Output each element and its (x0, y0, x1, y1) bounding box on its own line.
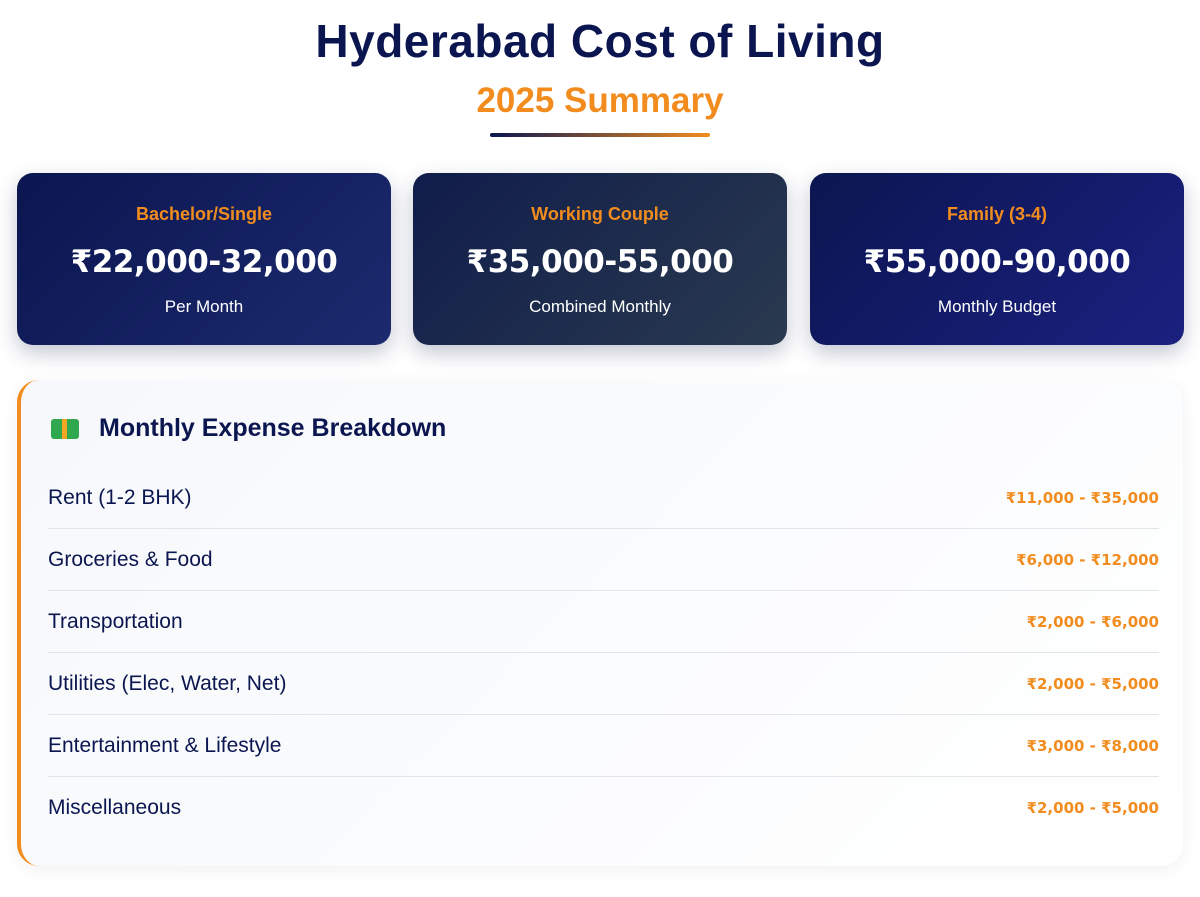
row: rent: ₹11,000 - ₹35,000 (1006, 488, 1159, 506)
row: groceries (48, 529, 1159, 591)
card: family (810, 173, 1184, 345)
card: bachelor: Per Month (165, 297, 243, 316)
row: entertainment: Entertainment & Lifestyle (48, 734, 281, 756)
row: entertainment (48, 715, 1159, 777)
subtitle: 2025 Summary (476, 81, 724, 120)
title: Hyderabad Cost of Living (315, 15, 885, 67)
card: family: Monthly Budget (938, 297, 1056, 316)
card: couple (413, 173, 787, 345)
panel: expense breakdown (17, 380, 1183, 866)
row: transport: Transportation (48, 610, 183, 632)
row: groceries: ₹6,000 - ₹12,000 (1016, 550, 1159, 568)
row: groceries: Groceries & Food (48, 548, 213, 570)
card: bachelor: Bachelor/Single (136, 204, 272, 224)
underline accent (490, 133, 710, 137)
card: couple: Working Couple (531, 204, 669, 224)
row: misc (48, 796, 1159, 819)
panel heading: Monthly Expense Breakdown (99, 414, 446, 442)
row: utilities (48, 653, 1159, 715)
row: misc: Miscellaneous (48, 796, 181, 819)
card: bachelor (17, 173, 391, 345)
card: bachelor: ₹22,000-32,000 (71, 244, 337, 280)
row: utilities: ₹2,000 - ₹5,000 (1027, 674, 1159, 692)
card: couple: Combined Monthly (529, 297, 671, 316)
row: transport: ₹2,000 - ₹6,000 (1027, 612, 1159, 630)
row: utilities: Utilities (Elec, Water, Net) (48, 672, 286, 694)
card: couple: ₹35,000-55,000 (467, 244, 733, 280)
row: transport (48, 591, 1159, 653)
row: misc: ₹2,000 - ₹5,000 (1027, 799, 1159, 817)
row: rent: Rent (1-2 BHK) (48, 486, 192, 508)
row: entertainment: ₹3,000 - ₹8,000 (1027, 736, 1159, 754)
row: rent (48, 467, 1159, 529)
card: family: ₹55,000-90,000 (864, 244, 1130, 280)
card: family: Family (3-4) (947, 204, 1047, 224)
